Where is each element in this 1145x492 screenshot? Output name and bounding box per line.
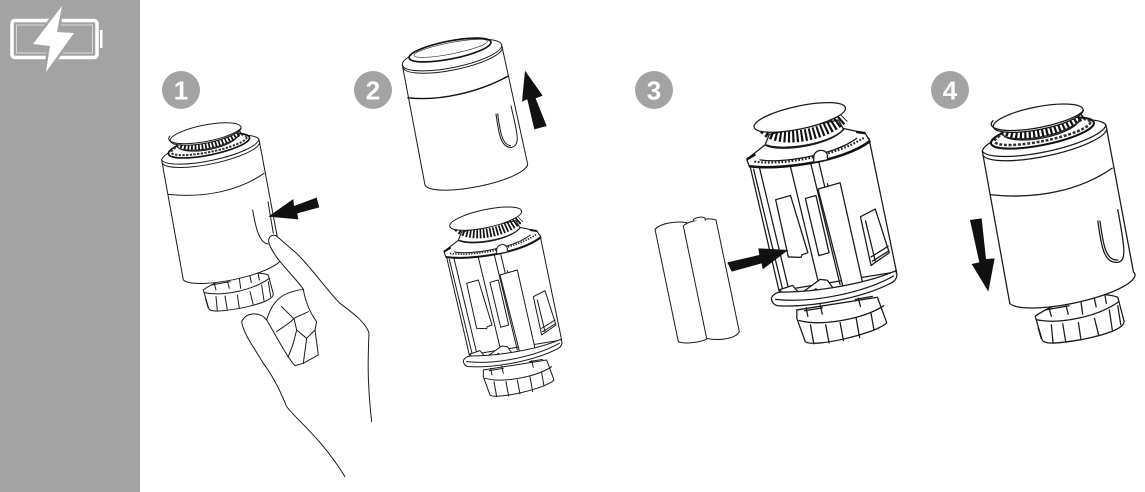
sidebar panel [0, 0, 140, 492]
arrow: insert [727, 248, 788, 272]
step number 2: 2 [366, 76, 380, 106]
hand [242, 235, 372, 477]
step number 2 [354, 71, 392, 109]
arrow: up [522, 71, 547, 129]
figure 2: opened thermostat [444, 202, 562, 397]
step number 4 [931, 71, 969, 109]
step number 4: 4 [943, 76, 958, 106]
arrow: press [268, 198, 319, 219]
figure 1: thermostat pressed by hand [162, 118, 372, 477]
step number 1: 1 [174, 76, 188, 106]
figure 4: cover replaced [982, 98, 1135, 343]
figure 3: batteries inserted [655, 97, 897, 344]
step number 3 [635, 71, 673, 109]
step number 3: 3 [647, 76, 661, 106]
thermostat body [747, 97, 897, 344]
figure 2: cover lifted [402, 33, 547, 190]
icon: battery charging [12, 6, 102, 72]
arrow: down [970, 218, 995, 292]
step number 1 [162, 71, 200, 109]
batteries [655, 217, 739, 343]
